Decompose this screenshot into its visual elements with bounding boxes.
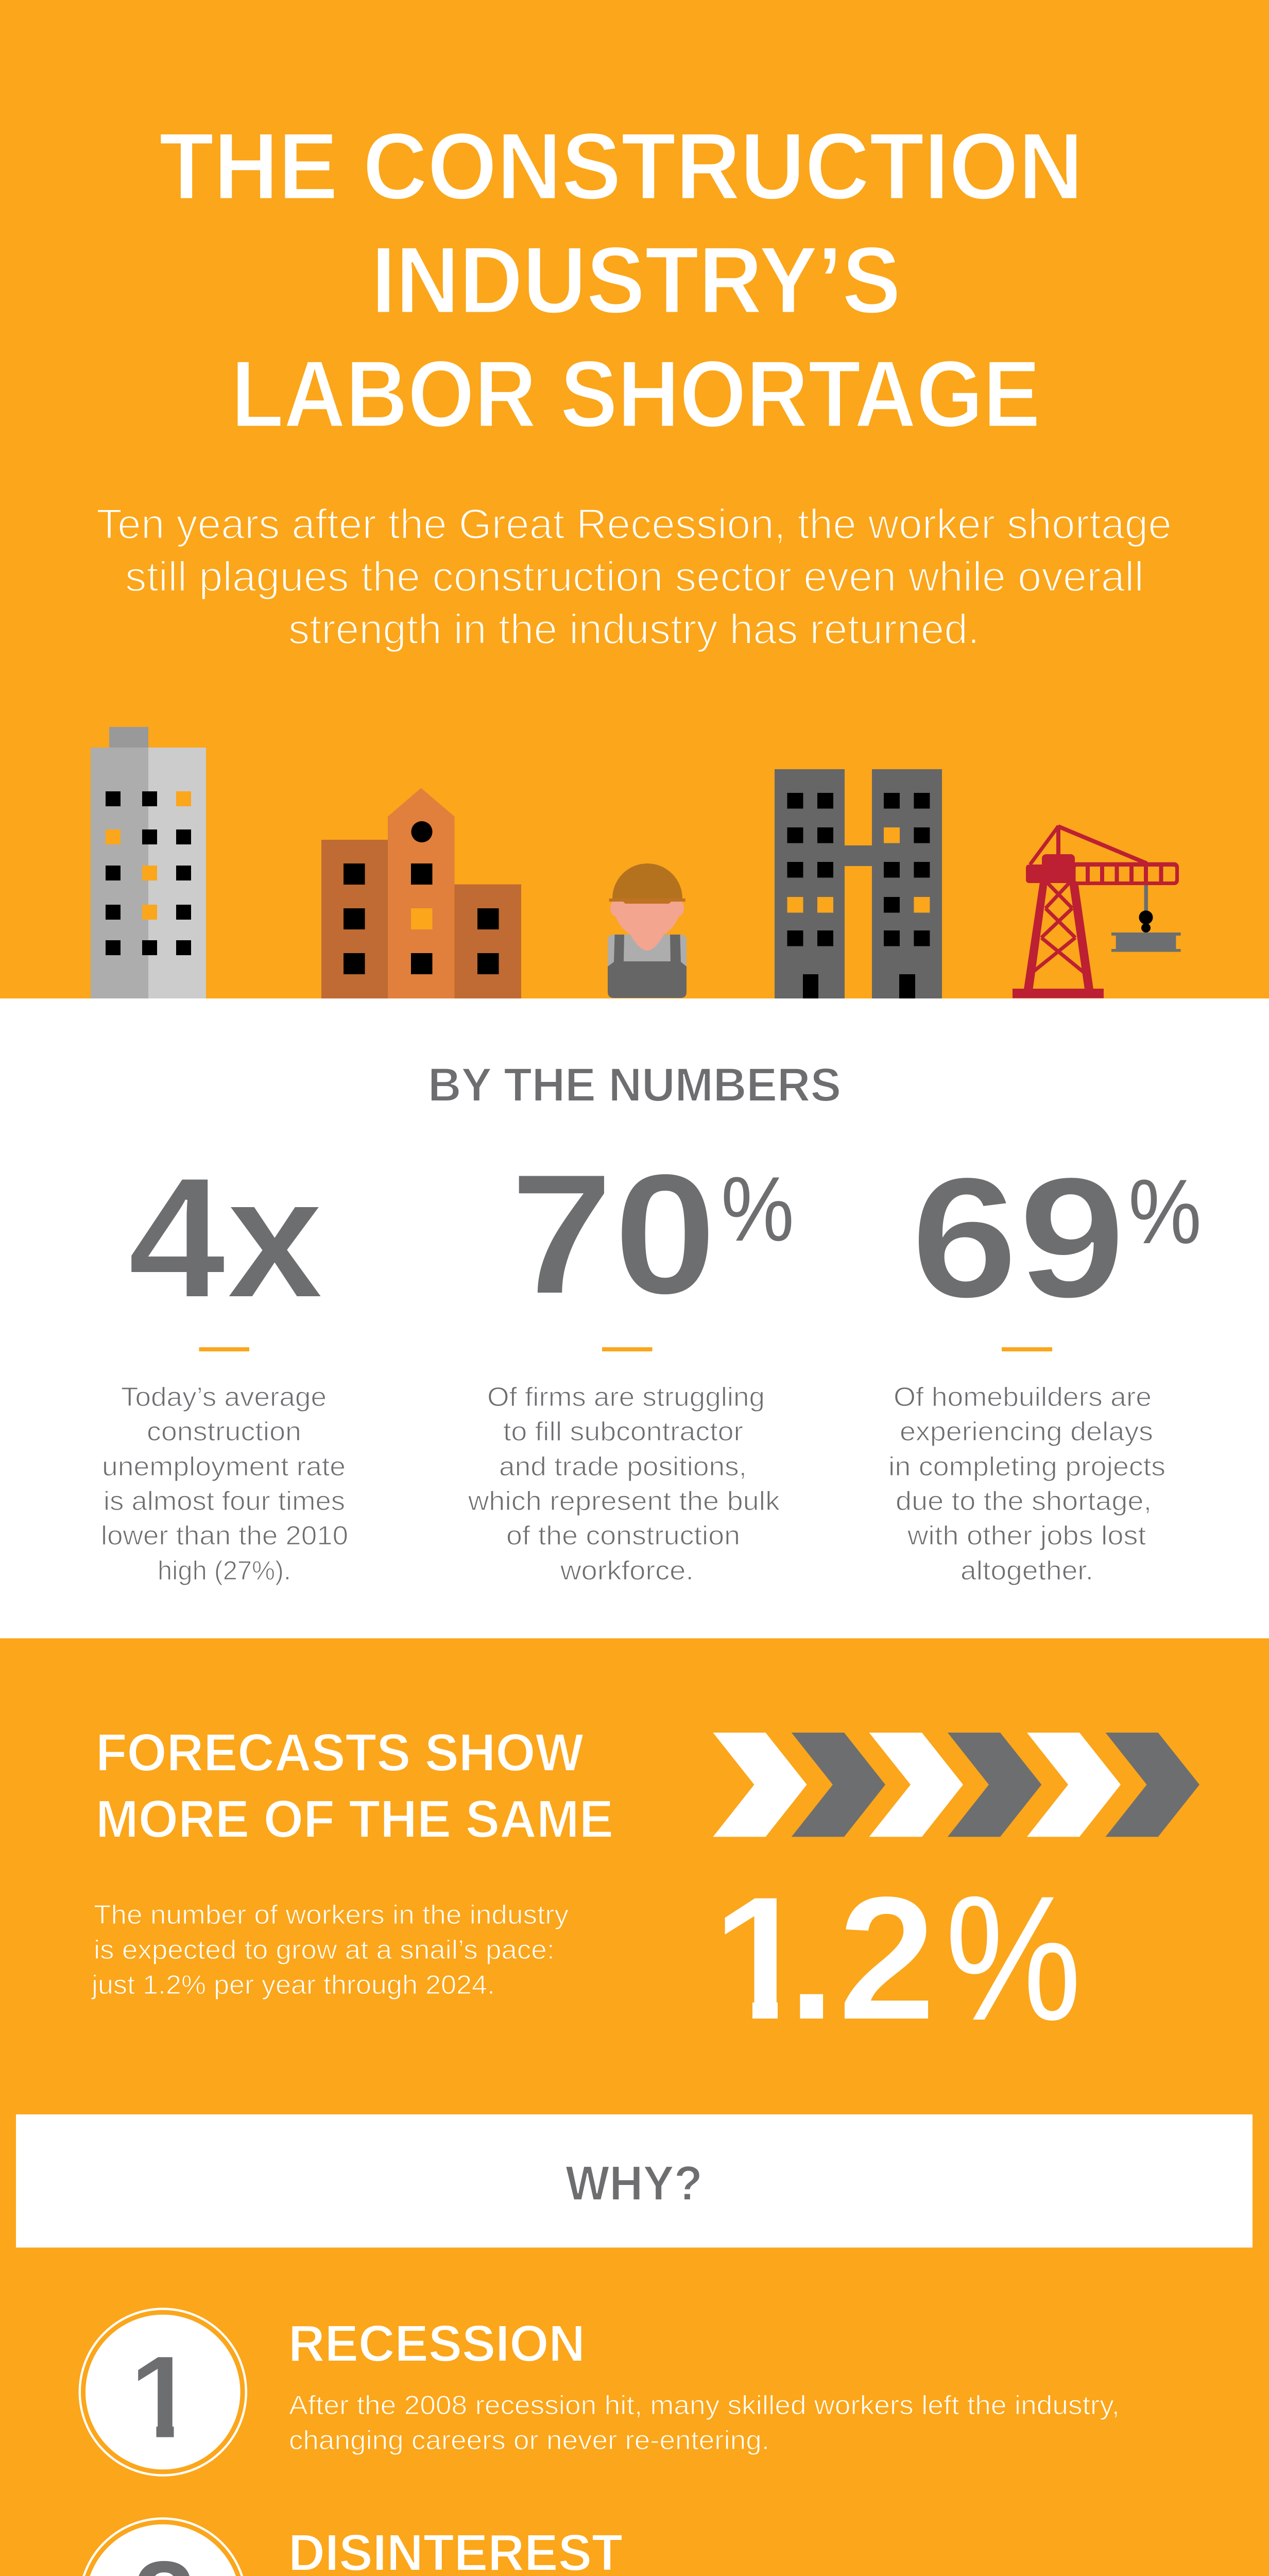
icon: dark twin tower	[775, 769, 942, 998]
stat text: is almost four times	[104, 1486, 345, 1516]
intro text: still plagues the construction sector even while overall	[125, 553, 1144, 600]
icon: tower crane	[1013, 825, 1181, 998]
heading: by the numbers: BY THE NUMBERS	[428, 1059, 841, 1111]
title: THE CONSTRUCTION	[159, 113, 1083, 219]
banner: why	[16, 2114, 1253, 2247]
stat text: high (27%).	[158, 1556, 291, 1586]
title: LABOR SHORTAGE	[231, 341, 1040, 447]
stat text: lower than the 2010	[101, 1521, 348, 1551]
reason text	[289, 2391, 1120, 2455]
stat: 69%: %	[1128, 1160, 1202, 1263]
reason heading: RECESSION	[288, 2315, 585, 2372]
heading: forecasts: FORECASTS SHOW	[96, 1723, 584, 1782]
panel: orange lower section	[0, 1638, 1269, 2576]
stat text: to fill subcontractor	[503, 1417, 743, 1447]
title: INDUSTRY’S	[371, 227, 901, 333]
intro text	[96, 501, 1172, 653]
stat text: and trade positions,	[499, 1452, 747, 1482]
stat text: with other jobs lost	[907, 1521, 1146, 1551]
intro text: Ten years after the Great Recession, the worker shortage	[96, 501, 1172, 548]
stat text: experiencing delays	[900, 1417, 1153, 1447]
reason 2	[80, 2518, 1130, 2576]
forecast text: just 1.2% per year through 2024.	[91, 1970, 495, 2000]
panel: header	[0, 0, 1269, 998]
forecast text: is expected to grow at a snail’s pace:	[94, 1935, 555, 1965]
reason text: changing careers or never re-entering.	[289, 2426, 769, 2455]
icon: brick building	[321, 788, 521, 998]
stat: 1.2%: 1	[712, 1859, 811, 2058]
stat text: due to the shortage,	[896, 1486, 1152, 1516]
number badge 1: 1	[129, 2331, 195, 2463]
reason text: After the 2008 recession hit, many skilled workers left the industry,	[289, 2391, 1120, 2420]
stat text: Of firms are struggling	[487, 1382, 765, 1412]
stat: 69%: 69	[911, 1141, 1126, 1334]
stat text	[101, 1382, 348, 1586]
stat text: altogether.	[961, 1556, 1093, 1586]
stat text: Of homebuilders are	[894, 1382, 1152, 1412]
stat text	[888, 1382, 1165, 1586]
stat: 4x: 4x	[128, 1141, 325, 1334]
heading: forecasts	[96, 1723, 613, 1849]
title	[159, 113, 1083, 447]
number badge 1	[80, 2309, 246, 2475]
stat text: in completing projects	[888, 1452, 1165, 1482]
heading: forecasts: MORE OF THE SAME	[96, 1789, 613, 1849]
stat text: workforce.	[560, 1556, 694, 1586]
icon: construction worker	[608, 863, 687, 998]
banner: why: WHY?	[565, 2156, 702, 2211]
stat: 4x	[101, 1141, 348, 1586]
stat: 1.2%: 2	[837, 1859, 936, 2058]
icon: grey tower	[91, 727, 206, 998]
stat: 1.2%	[712, 1859, 1082, 2058]
forecast text	[91, 1900, 569, 2000]
stat text: construction	[147, 1417, 301, 1447]
forecast text: The number of workers in the industry	[94, 1900, 569, 1930]
stat: 70%: %	[721, 1158, 794, 1260]
stat: 1.2%: %	[945, 1859, 1082, 2058]
stat text: unemployment rate	[102, 1452, 346, 1482]
panel: by the numbers	[101, 1059, 1202, 1586]
stat: 1.2%: .	[787, 1859, 836, 2058]
number badge 2	[80, 2518, 246, 2576]
stat: 70%: 70	[510, 1138, 717, 1330]
intro text: strength in the industry has returned.	[288, 606, 980, 653]
stat text: Today’s average	[121, 1382, 327, 1412]
stat text	[468, 1382, 780, 1586]
stat: 70%	[468, 1138, 794, 1586]
icon: chevron arrows	[713, 1733, 1199, 1837]
reason 1	[80, 2309, 1120, 2475]
stat text: which represent the bulk	[468, 1486, 780, 1516]
stat: 69%	[888, 1141, 1202, 1586]
stat text: of the construction	[506, 1521, 740, 1551]
